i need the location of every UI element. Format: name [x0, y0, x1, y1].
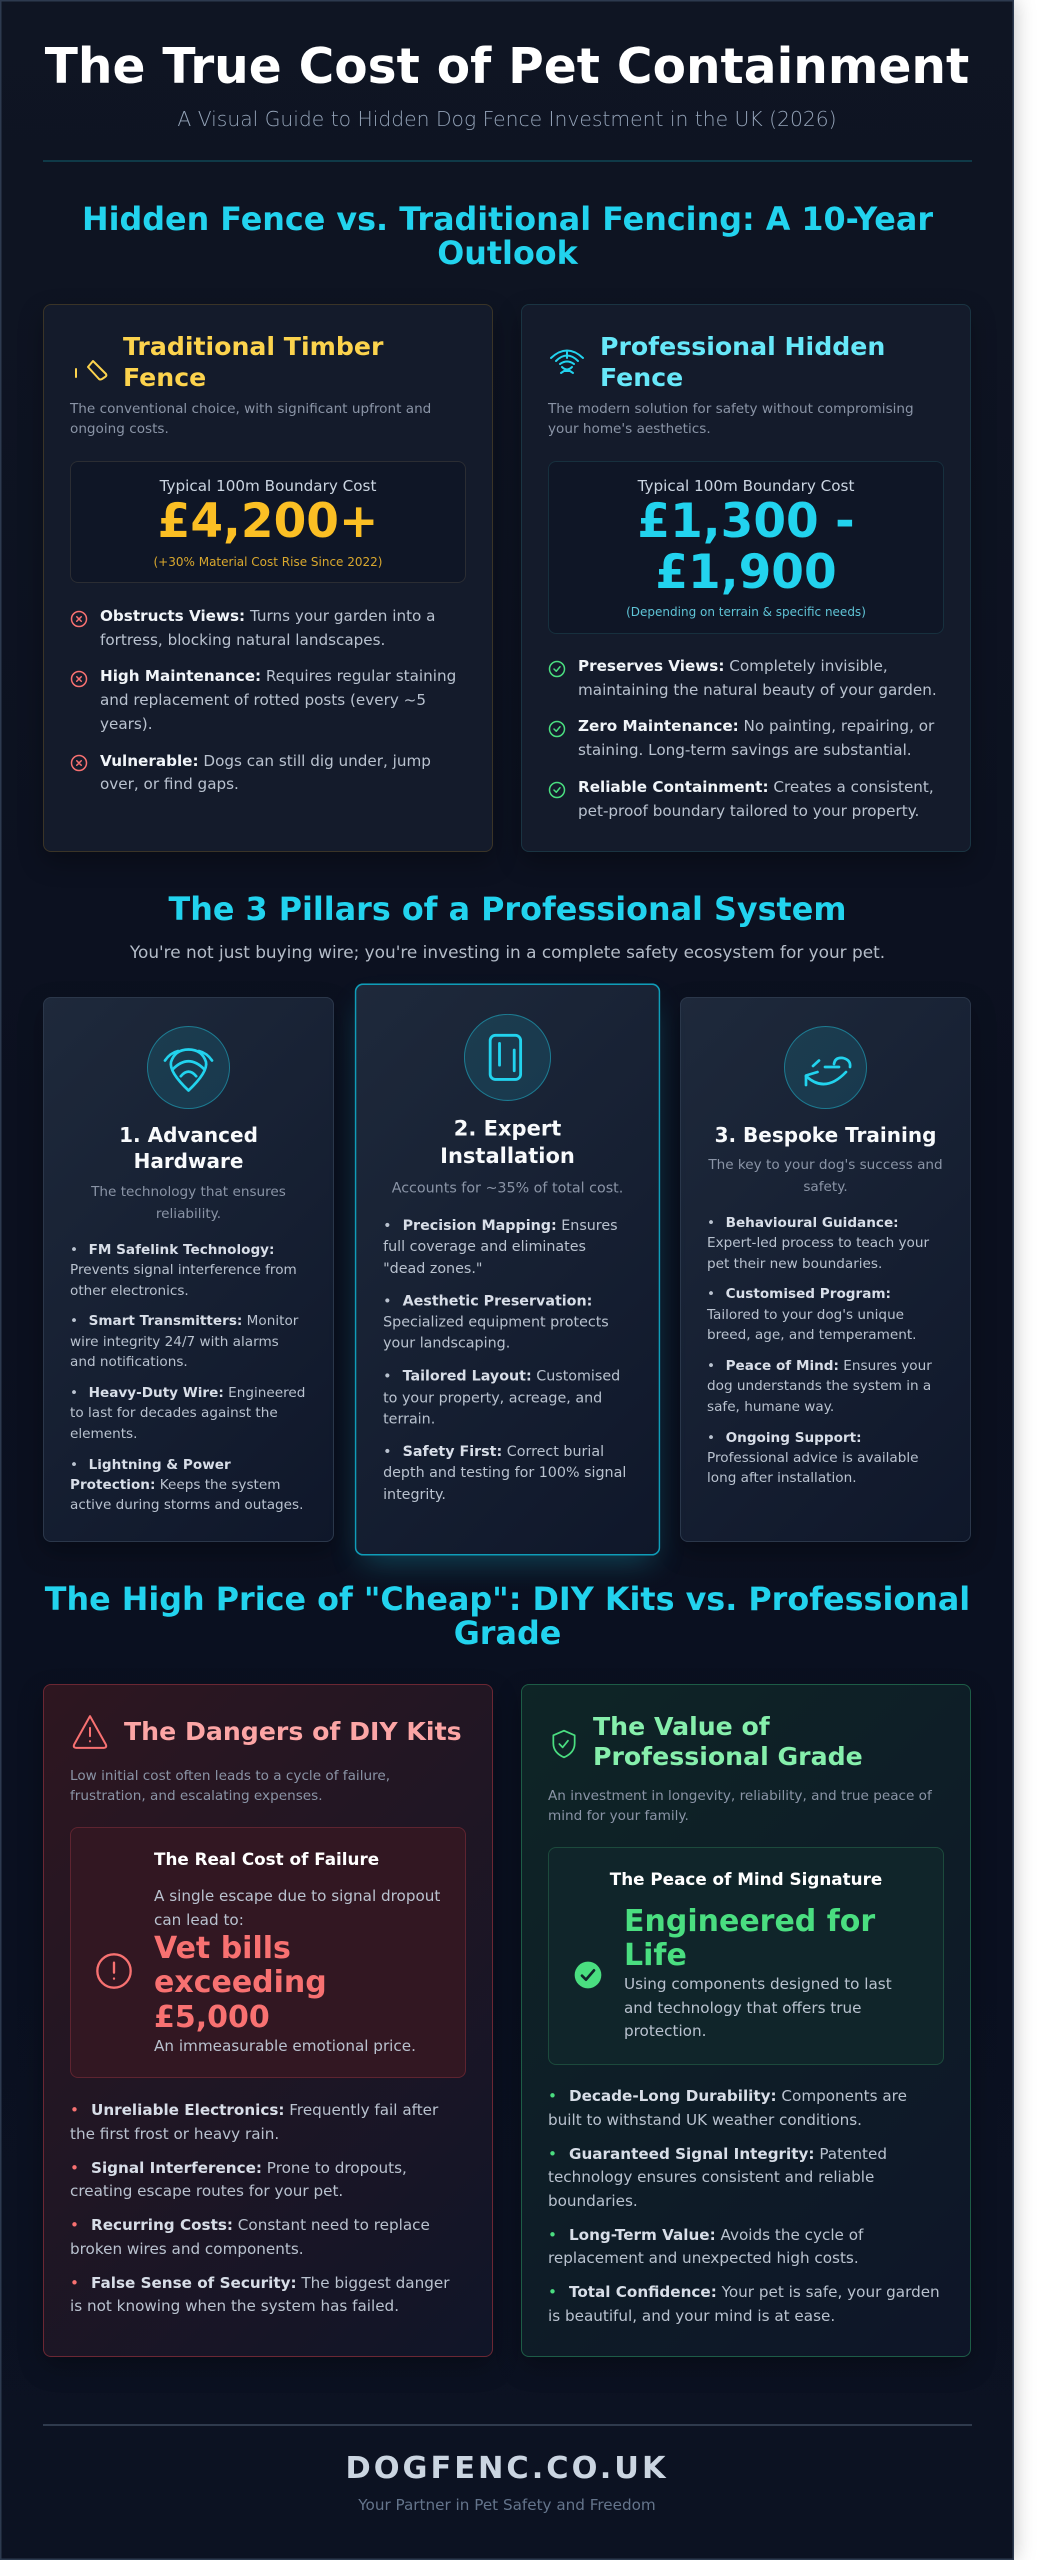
description: An investment in longevity, reliability, and true peace of	[548, 1788, 932, 1804]
pillar list: Safety First: Correct burial depth and testing for 100% signal integrity.	[383, 1443, 626, 1503]
callout text: and technology that offers true	[624, 1999, 861, 2017]
price label: Typical 100m Boundary Cost	[638, 477, 854, 495]
callout title: The Peace of Mind Signature	[610, 1869, 882, 1889]
icon: alert circle	[96, 1953, 132, 1989]
pillar list: Aesthetic Preservation: Specialized equipment protects your landscaping.	[383, 1293, 609, 1352]
list: professional benefits: technology ensures consistent and reliable	[548, 2168, 874, 2186]
list: DIY problems: •	[70, 2216, 79, 2234]
pillar list	[70, 1242, 305, 1513]
list: benefits: Reliable Containment: Creates a consistent,	[578, 778, 934, 796]
pillar list: •	[383, 1443, 392, 1460]
list: benefits: Zero Maintenance: No painting, repairing, or	[578, 717, 934, 735]
pillar list: •	[70, 1313, 78, 1329]
list: DIY problems: •	[70, 2159, 79, 2177]
heading: dangers: The Dangers of DIY Kits	[124, 1717, 462, 1746]
icon: filled check	[574, 1962, 602, 1988]
pillar list: Heavy-Duty Wire: Engineered to last for decades against the elements.	[70, 1385, 305, 1442]
header divider	[43, 160, 972, 162]
callout figure: Life	[624, 1938, 687, 1973]
heading: three pillars: The 3 Pillars of a Professional System	[169, 891, 846, 928]
heading: professional: Professional Hidden Fence	[600, 332, 885, 392]
pillar list: •	[707, 1286, 715, 1302]
description	[548, 1788, 932, 1824]
list: professional benefits: •	[548, 2087, 557, 2105]
title: The True Cost of Pet Containment	[45, 39, 969, 95]
footer divider	[43, 2424, 972, 2426]
pillar list: Behavioural Guidance: Expert-led process to teach your pet their new boundaries.	[707, 1215, 929, 1272]
icon: warning triangle	[72, 1715, 108, 1749]
footer tagline: Your Partner in Pet Safety and Freedom	[358, 2496, 656, 2514]
panel: pillar 2 installation	[355, 983, 660, 1556]
icon: signal shield	[147, 1026, 230, 1108]
description: Low initial cost often leads to a cycle of failure,	[70, 1768, 390, 1784]
description	[70, 1768, 390, 1804]
price note: (Depending on terrain & specific needs)	[626, 605, 866, 619]
callout: real cost of failure	[70, 1827, 466, 2078]
callout figure: Engineered for	[624, 1904, 875, 1939]
list: benefits: Preserves Views: Completely invisible,	[578, 657, 888, 675]
list: drawbacks: over, or find gaps.	[100, 775, 239, 793]
callout figure	[154, 1931, 327, 2034]
list: DIY problems: False Sense of Security: The biggest danger	[91, 2274, 449, 2292]
icon: timber plank	[75, 360, 108, 380]
pillar list	[706, 1215, 932, 1486]
panel: value of professional grade	[521, 1684, 971, 2357]
panel: pillar 1 hardware	[43, 997, 334, 1542]
list: DIY problems: Recurring Costs: Constant need to replace	[91, 2216, 430, 2234]
icon: training loop	[784, 1026, 867, 1108]
heading: professional value: The Value of Professional Grade	[593, 1712, 863, 1771]
pillar list: •	[70, 1242, 78, 1258]
callout text	[624, 1975, 892, 2040]
price value: £1,300 -	[637, 494, 855, 549]
list: drawbacks: Vulnerable: Dogs can still dig under, jump	[100, 752, 431, 770]
icon: boundary map	[464, 1013, 551, 1100]
list: professional benefits: Long-Term Value: Avoids the cycle of	[569, 2226, 863, 2244]
list: drawbacks: High Maintenance: Requires regular staining and replacement of rotted posts (every ~5 years).	[100, 667, 456, 733]
pillar list: FM Safelink Technology: Prevents signal interference from other electronics.	[70, 1242, 297, 1299]
pillar list: Precision Mapping: Ensures full coverage and eliminates	[383, 1218, 618, 1256]
pillar description: The technology that ensures reliability.	[91, 1184, 286, 1222]
list: professional benefits: Total Confidence: Your pet is safe, your garden	[569, 2283, 940, 2301]
pillar list: Lightning & Power Protection: Keeps the system active during storms and outages.	[70, 1457, 303, 1513]
list: professional benefits: built to withstand UK weather conditions.	[548, 2111, 862, 2129]
list: benefits: staining. Long-term savings are substantial.	[578, 741, 912, 759]
price value: £1,900	[655, 545, 837, 600]
pillar list: •	[707, 1358, 715, 1374]
callout note: An immeasurable emotional price.	[154, 2036, 416, 2054]
pillar list: Customised Program: Tailored to your dog's unique breed, age, and temperament.	[707, 1286, 916, 1343]
list: professional benefits: boundaries.	[548, 2192, 638, 2210]
callout title: The Real Cost of Failure	[154, 1849, 379, 1869]
callout figure: £5,000	[154, 2000, 270, 2034]
pillars intro text: You're not just buying wire; you're investing in a complete safety ecosystem for your pet.	[130, 942, 885, 962]
list: drawbacks: fortress, blocking natural landscapes.	[100, 631, 385, 649]
price value	[637, 494, 855, 600]
list: professional benefits: •	[548, 2145, 557, 2163]
pillar list: •	[70, 1385, 78, 1401]
list: benefits	[548, 657, 937, 820]
callout: peace of mind	[548, 1847, 944, 2065]
list: professional benefits: is beautiful, and your mind is at ease.	[548, 2307, 835, 2325]
list: DIY problems: broken wires and components.	[70, 2240, 304, 2258]
list: professional benefits	[548, 2087, 940, 2325]
callout figure: Vet bills	[154, 1931, 291, 1966]
pillar list: •	[383, 1218, 392, 1234]
description: frustration, and escalating expenses.	[70, 1788, 323, 1804]
list: professional benefits: •	[548, 2226, 557, 2244]
price box	[70, 461, 466, 583]
pillar list: •	[383, 1293, 392, 1310]
list: professional benefits: Guaranteed Signal Integrity: Patented	[569, 2145, 887, 2163]
list: professional benefits: •	[548, 2283, 557, 2301]
heading: DIY vs professional: The High Price of "Cheap": DIY Kits vs. Professional Grade	[45, 1581, 970, 1652]
callout text: A single escape due to signal dropout can lead to:	[154, 1887, 440, 1929]
icon: shield check	[552, 1730, 576, 1758]
pillar list: Smart Transmitters: Monitor wire integrity 24/7 with alarms and notifications.	[70, 1313, 298, 1370]
list: DIY problems: the first frost or heavy rain.	[70, 2125, 279, 2143]
callout figure: exceeding	[154, 1965, 327, 2000]
pillar list: •	[383, 1368, 392, 1385]
panel: pillar 3 training	[680, 997, 971, 1542]
callout figure	[624, 1904, 876, 1973]
price note: (+30% Material Cost Rise Since 2022)	[154, 555, 382, 569]
panel: dangers of DIY	[43, 1684, 493, 2357]
panel: professional hidden fence	[521, 304, 971, 852]
pillar list: •	[70, 1457, 78, 1473]
pillar description: Accounts for ~35% of total cost.	[392, 1180, 623, 1197]
pillar list: Tailored Layout: Customised to your property, acreage, and terrain.	[383, 1368, 620, 1428]
list: DIY problems: is not knowing when the system has failed.	[70, 2297, 399, 2315]
pillar list: "dead zones."	[383, 1260, 482, 1277]
pillar list: •	[707, 1430, 715, 1446]
pillar title: 2. Expert Installation	[440, 1115, 575, 1169]
subtitle: A Visual Guide to Hidden Dog Fence Investment in the UK (2026)	[177, 107, 837, 131]
icon: signal dog	[550, 350, 584, 374]
list: professional benefits: Decade-Long Durability: Components are	[569, 2087, 907, 2105]
list: DIY problems: •	[70, 2274, 79, 2292]
footer brand: DOGFENC.CO.UK	[345, 2451, 669, 2486]
callout text: Using components designed to last	[624, 1975, 892, 1993]
pillar list	[383, 1218, 626, 1503]
pillar description: The key to your dog's success and safety.	[708, 1157, 943, 1195]
pillar list: Ongoing Support: Professional advice is available long after installation.	[707, 1430, 918, 1486]
pillar title: 1. Advanced Hardware	[119, 1123, 258, 1173]
description: The conventional choice, with significant upfront and ongoing costs.	[70, 401, 431, 437]
list: professional benefits: replacement and unexpected high costs.	[548, 2249, 859, 2267]
pillar list: •	[707, 1215, 715, 1231]
list: drawbacks	[70, 607, 456, 793]
description: The modern solution for safety without compromising your home's aesthetics.	[548, 401, 914, 437]
list: DIY problems: •	[70, 2101, 79, 2119]
heading: hidden vs traditional: Hidden Fence vs. Traditional Fencing: A 10-Year Outlook	[82, 201, 933, 272]
pillar title: 3. Bespoke Training	[715, 1123, 936, 1147]
pillar list: Peace of Mind: Ensures your dog understands the system in a safe, humane way.	[707, 1358, 932, 1415]
list: benefits: maintaining the natural beauty of your garden.	[578, 681, 937, 699]
list: benefits: pet-proof boundary tailored to your property.	[578, 802, 919, 820]
panel: traditional timber fence	[43, 304, 493, 852]
list: DIY problems: creating escape routes for your pet.	[70, 2182, 343, 2200]
price box	[548, 461, 944, 634]
list: drawbacks: Obstructs Views: Turns your garden into a	[100, 607, 435, 625]
callout text: protection.	[624, 2022, 706, 2040]
list: DIY problems: Signal Interference: Prone to dropouts,	[91, 2159, 407, 2177]
description: mind for your family.	[548, 1808, 689, 1824]
list: DIY problems: Unreliable Electronics: Frequently fail after	[91, 2101, 438, 2119]
list: DIY problems	[70, 2101, 450, 2315]
price label: Typical 100m Boundary Cost	[160, 477, 376, 495]
price value: £4,200+	[158, 494, 378, 549]
heading: traditional: Traditional Timber Fence	[123, 332, 383, 392]
